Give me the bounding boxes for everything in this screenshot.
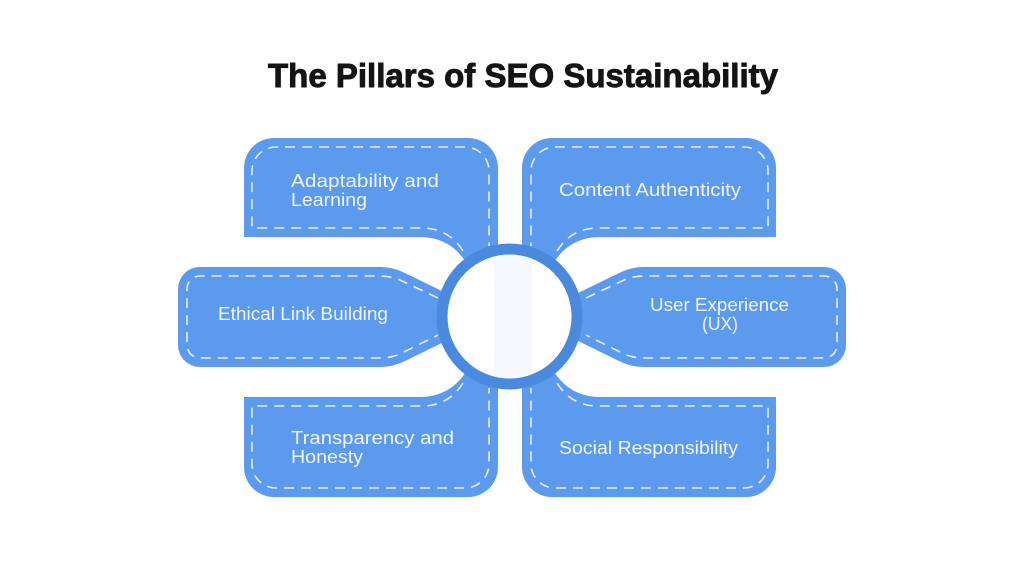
panel: Transparency and Honesty: Transparency and	[291, 428, 454, 448]
panel: User Experience (UX)	[574, 267, 846, 367]
panel: Ethical Link Building	[178, 267, 450, 367]
title: The Pillars of SEO Sustainability	[268, 57, 779, 94]
panel: Adaptability and Learning: Learning	[291, 190, 367, 210]
center ring	[442, 249, 577, 384]
panel: Content Authenticity: Content Authenticity	[559, 180, 741, 200]
panel: Social Responsibility: Social Responsibility	[559, 438, 738, 458]
panel: Adaptability and Learning	[244, 138, 498, 270]
panel: Adaptability and Learning: Adaptability and	[291, 171, 439, 191]
panel: Content Authenticity	[522, 138, 776, 270]
panel: Transparency and Honesty: Honesty	[291, 447, 363, 467]
panel: User Experience (UX): (UX)	[702, 314, 738, 334]
panel: Transparency and Honesty	[244, 364, 498, 497]
panel: User Experience (UX): User Experience	[650, 295, 789, 315]
panel: Ethical Link Building: Ethical Link Building	[218, 304, 388, 324]
panel: Social Responsibility	[522, 364, 776, 497]
